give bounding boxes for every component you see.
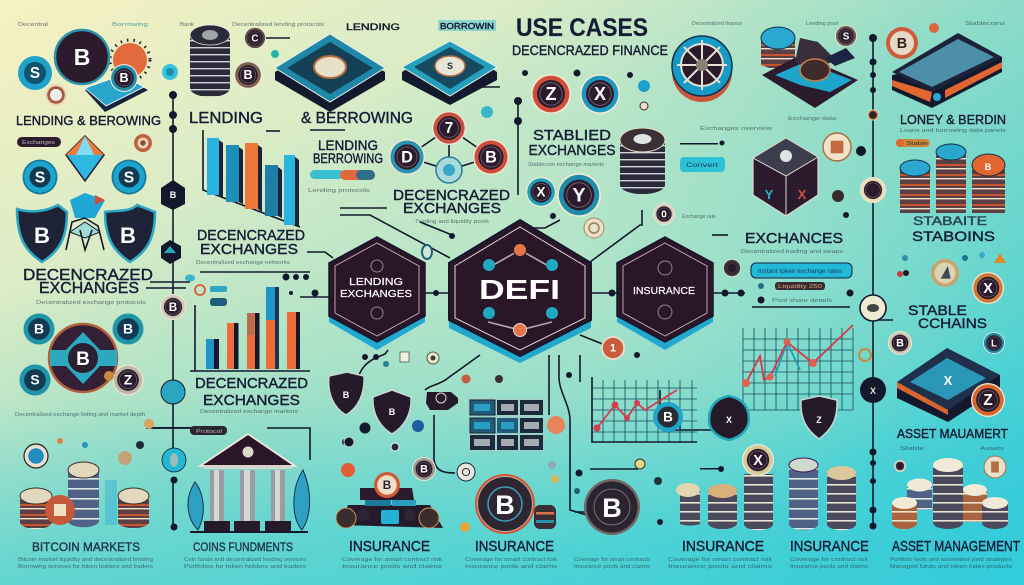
control: mid-left teal slider xyxy=(185,274,227,306)
heading: insurance two: Insurance pools and claims xyxy=(465,564,558,570)
bottom-left caption: first: Borrowing services for token holders and traders xyxy=(18,564,154,570)
heading: asset management upper: ASSET MAUAMERT xyxy=(897,426,1008,441)
pill label: Exchanges xyxy=(22,140,56,146)
icon: isometric machine xyxy=(762,38,858,108)
heading: decentralized exchanges lower xyxy=(195,375,308,415)
heading: exchances: Decentralized trading and swaps xyxy=(741,249,844,255)
icons: coins stabaite: X xyxy=(983,281,993,297)
icon: shield coin lower right xyxy=(709,396,749,440)
icons: coins top right xyxy=(835,23,939,59)
icon: small coins by stack: B xyxy=(243,68,253,82)
heading: stabaite staboins: STABAITE xyxy=(913,214,987,228)
heading: insurance four xyxy=(790,538,869,570)
icons: coins above asset card: B xyxy=(896,338,904,350)
labels: lending and borrowing teal tags: LENDING xyxy=(346,22,400,32)
control panel: exchange sliders: Pool share details xyxy=(772,298,833,304)
icon: isometric card two xyxy=(402,41,497,105)
icon: coin cluster left: S xyxy=(30,372,40,388)
icon: white node coin xyxy=(860,295,886,321)
heading: decentralized exchanges center: DECENCRAZED xyxy=(393,187,510,204)
icons: red and teal coins: X xyxy=(594,84,606,104)
icons: coins below stablied: Y xyxy=(572,185,586,207)
left hexagon: lending exchanges: LENDING xyxy=(349,277,403,288)
heading: insurance four: Insurance pools and claims xyxy=(790,564,869,570)
icons: coins beside gem xyxy=(22,134,152,194)
heading: loney berdin: Loans and borrowing data panels xyxy=(900,128,1007,134)
node: left dark hex: B xyxy=(169,301,177,314)
left hexagon: lending exchanges: EXCHANGES xyxy=(340,289,412,300)
bottom-left caption: first: BITCOIN MARKETS xyxy=(32,540,140,554)
center hexagon: defi xyxy=(449,220,591,363)
line chart: center xyxy=(592,377,697,442)
icon: big insurance coin two: B xyxy=(602,493,622,523)
icon: chain link badge xyxy=(422,245,432,259)
heading: insurance one: Insurance pools and claims xyxy=(342,564,443,570)
line chart: right xyxy=(742,325,853,410)
icon: dark badge xyxy=(426,392,458,410)
heading: stable chains xyxy=(908,302,987,331)
heading: decentralized exchanges left: DECENCRAZED xyxy=(23,267,153,284)
title: USE CASES xyxy=(516,14,648,42)
icon: coin cluster left: B xyxy=(123,321,133,337)
heading: asset management upper: Assets xyxy=(980,446,1005,452)
circuit connector lines xyxy=(146,38,893,527)
icon: orange coin near center xyxy=(601,336,625,360)
icon: shield lower right: Z xyxy=(816,415,822,425)
icon: coin cluster left: Z xyxy=(124,372,133,388)
heading: decentralized exchanges mid left: Decentralized exchange networks xyxy=(196,260,291,266)
heading: decentralized exchanges mid left xyxy=(196,227,305,266)
icons: three stablecoin stacks xyxy=(900,144,1005,213)
icon cluster: lending and borrowing: B xyxy=(74,44,90,70)
scattered badges around shield xyxy=(341,420,475,481)
icon: coin cluster left: B xyxy=(76,349,90,370)
heading: asset management upper: Stable xyxy=(900,446,924,452)
node: left dark hex: B xyxy=(170,190,177,200)
bottom-left caption: first xyxy=(18,540,154,570)
heading: decentralized exchanges mid left: DECENCRAZED xyxy=(197,227,305,244)
heading: stabaite staboins xyxy=(912,214,995,244)
icon: coin cluster left xyxy=(20,314,144,396)
heading: asset management upper xyxy=(897,426,1008,452)
right hexagon: insurance xyxy=(617,237,713,350)
icon: shield mid xyxy=(373,390,411,434)
pill label xyxy=(17,137,61,147)
small connector nodes xyxy=(169,34,877,530)
caption: third insurance body xyxy=(574,557,651,570)
heading: insurance three: Insurance pools and claims xyxy=(668,564,773,570)
icon: network of coins: 7 xyxy=(445,120,453,137)
heading: and borrowing: & BERROWING xyxy=(301,110,413,127)
labels: lending and borrowing teal tags: BORROWIN xyxy=(440,22,494,31)
control panel: exchange sliders xyxy=(723,259,852,304)
small caption text lines across the top: Exchanges overview xyxy=(700,126,773,132)
icon: shield mid: B xyxy=(389,407,396,417)
icon cluster: lending and borrowing xyxy=(18,30,150,112)
icon: large isometric book xyxy=(892,33,1002,108)
heading: insurance two xyxy=(465,538,558,570)
heading: insurance two: Coverage for smart contract risk xyxy=(465,557,558,563)
icons: coins above asset card: X xyxy=(870,386,876,396)
icon: coin stack center xyxy=(620,128,665,194)
bottom-left caption: second: COINS FUNDMENTS xyxy=(193,540,293,554)
icon: temple xyxy=(188,434,310,533)
heading: stable chains: CCHAINS xyxy=(918,315,987,331)
keypad panel xyxy=(468,398,545,452)
icon: isometric asset card xyxy=(897,348,1005,422)
icons: coins below stablied: 0 xyxy=(661,209,667,220)
heading: decentralized exchanges left: EXCHANGES xyxy=(39,280,139,297)
icon: shield coin lower right: X xyxy=(726,415,732,425)
heading: lending borrowing second: LENDING xyxy=(318,138,378,153)
bottom insurance stacks xyxy=(676,444,856,530)
heading: insurance one xyxy=(342,538,443,570)
bottom left stacks xyxy=(20,438,149,529)
icon: coin stack top xyxy=(190,25,230,97)
node: caption pill bottom left: Protocol xyxy=(196,429,222,435)
icon: coin cluster left: B xyxy=(34,321,44,337)
heading: decentralized exchanges center: EXCHANGES xyxy=(403,200,501,217)
icon: shield small left: B xyxy=(343,390,350,400)
icon: network of coins xyxy=(389,106,509,183)
bar chart: isometric xyxy=(203,130,300,227)
icon: cube: X xyxy=(798,187,807,202)
heading: stablied exchanges: EXCHANGES xyxy=(528,142,616,159)
small caption text lines across the top: Borrowing xyxy=(112,22,148,28)
icons: coins below stablied: X xyxy=(536,184,546,200)
heading: insurance two: INSURANCE xyxy=(475,538,554,555)
bottom-left caption: second: Portfolios for token holders and traders xyxy=(184,564,307,570)
icon: left shield two xyxy=(105,205,155,262)
icon: big insurance coin one xyxy=(475,474,556,534)
line chart: center: B xyxy=(663,410,673,424)
node: caption pill bottom left xyxy=(144,419,227,435)
heading: decentralized exchanges lower: EXCHANGES xyxy=(203,392,300,409)
icon: secondary gem network xyxy=(66,193,105,250)
small caption text lines across the top: Lending pool xyxy=(806,21,838,27)
small caption text lines across the top: Bank xyxy=(180,22,195,28)
icon: orange coin near center: 1 xyxy=(610,343,616,355)
heading: loney berdin: LONEY & BERDIN xyxy=(900,112,1006,127)
icon: small coins by stack xyxy=(162,27,279,89)
bottom insurance stacks: X xyxy=(753,453,763,469)
icon: teal topped stack xyxy=(761,27,795,77)
heading: insurance one: INSURANCE xyxy=(349,538,430,555)
icon: isometric card one xyxy=(275,34,385,112)
sliders: small pills xyxy=(308,170,375,194)
heading: lending: LENDING xyxy=(189,110,263,127)
icon: shield lower right xyxy=(801,396,837,439)
icon: orange coin by keypad xyxy=(547,416,565,434)
asset management stacks xyxy=(892,456,1008,529)
bar chart: flat xyxy=(190,287,310,371)
icon: isometric asset card: X xyxy=(944,373,953,388)
heading: insurance three: INSURANCE xyxy=(682,538,764,555)
labels: lending and borrowing teal tags xyxy=(346,20,496,32)
icon: cube xyxy=(753,138,818,216)
heading: lending borrowing second: BERROWING xyxy=(313,151,383,166)
lower left stacks: small badges xyxy=(383,352,503,384)
title xyxy=(512,14,668,58)
icon: teal coin bottom-left line xyxy=(162,448,186,472)
icons: coins near cube xyxy=(823,110,886,203)
heading: loney berdin xyxy=(900,112,1007,134)
small pill tag xyxy=(896,139,930,147)
icon: cube: Y xyxy=(765,187,774,202)
icons: coins top right: B xyxy=(897,36,907,52)
label tag mid right: Exchange rate xyxy=(682,214,716,220)
node: left dark hex xyxy=(160,180,186,404)
icon: ship wheel xyxy=(672,36,732,102)
small caption text lines across the top xyxy=(18,21,1006,132)
icons: red and teal coins: Z xyxy=(546,84,556,104)
pill: teal button upper: Convert xyxy=(686,163,718,169)
pill: teal button upper xyxy=(680,140,725,172)
icon: network of coins: B xyxy=(485,148,497,166)
icons: coins above asset card xyxy=(859,331,1005,403)
icons: coins above asset card: L xyxy=(991,338,997,349)
icon: left shield two: B xyxy=(120,223,136,248)
icons: coins beside gem: S xyxy=(124,169,134,186)
bottom-left caption: second xyxy=(184,540,307,570)
small caption text lines across the top: Decentral xyxy=(18,22,48,28)
center hexagon: defi: DEFI xyxy=(479,274,560,305)
icon cluster: lending and borrowing: S xyxy=(30,65,40,82)
icons: coins beside gem: S xyxy=(35,169,45,186)
heading: insurance three xyxy=(668,538,773,570)
heading: asset management: Managed funds and token index products xyxy=(890,564,1013,570)
heading: insurance three: Coverage for smart contract risk xyxy=(668,557,773,563)
right hexagon: insurance: INSURANCE xyxy=(633,286,695,297)
icon: left shield one xyxy=(17,205,67,262)
heading: decentralized exchanges mid left: EXCHANGES xyxy=(200,241,298,258)
heading: decentralized exchanges center xyxy=(393,187,510,225)
heading: exchances: EXCHANCES xyxy=(745,230,843,247)
caption: third insurance body: Insurance pools and claims xyxy=(574,564,651,570)
icon: big insurance coin one: B xyxy=(495,490,515,520)
sliders: small pills: Lending protocols xyxy=(308,188,371,194)
icons: coins top right: S xyxy=(843,31,850,42)
small caption text lines across the top: Decentralized finance xyxy=(692,21,742,27)
small caption text lines across the top: Decentralized lending protocols xyxy=(232,22,325,28)
scattered badges around shield: B xyxy=(420,464,428,476)
heading: stablied exchanges: Stablecoin exchange markets xyxy=(528,162,605,168)
icons: three stablecoin stacks: B xyxy=(985,162,992,172)
icon: small coins by stack: C xyxy=(251,33,259,44)
icon: isometric asset card: Z xyxy=(983,392,993,409)
heading: asset management: Portfolio tools and automated yield strategies xyxy=(890,557,1013,563)
heading: stablied exchanges xyxy=(528,127,616,168)
heading: insurance one: Coverage for smart contract risk xyxy=(342,557,443,563)
icon: gem xyxy=(66,136,104,181)
icon: left shield one: B xyxy=(34,223,50,248)
heading: decentralized exchanges center: Trading and liquidity pools xyxy=(415,219,490,225)
icon: shield small left xyxy=(329,372,364,415)
small caption text lines across the top: Stablecoins xyxy=(965,21,1006,27)
heading: stablied exchanges: STABLIED xyxy=(533,127,611,144)
heading: decentralized exchanges left: Decentralized exchange protocols xyxy=(36,300,147,306)
heading: stabaite staboins: STABOINS xyxy=(912,228,995,244)
icon cluster: lending and borrowing: B xyxy=(119,71,129,85)
icon: isometric card two: S xyxy=(447,61,453,71)
heading: lending borrowing second xyxy=(313,138,383,166)
small caption text lines across the top: Exchange data xyxy=(788,116,836,122)
control panel: exchange sliders: Instant token exchange rates xyxy=(758,269,842,275)
bottom-left caption: second: Coin funds and decentralized lending services xyxy=(184,557,307,563)
heading: insurance four: Coverage for contract risk xyxy=(790,557,869,563)
icons: coins below stablied xyxy=(526,173,675,238)
icon: big insurance coin two xyxy=(460,459,662,535)
icon: car machine: B xyxy=(383,479,391,492)
caption: third insurance body: Coverage for smart contracts xyxy=(574,557,651,563)
heading: decentralized exchanges lower: Decentralized exchange markets xyxy=(200,409,299,415)
heading: decentralized exchanges left xyxy=(23,267,153,306)
control panel: exchange sliders: Liquidity 250 xyxy=(778,284,822,290)
caption: asset line left: Decentralized exchange listing and market depth xyxy=(15,412,145,418)
icon: network of coins: D xyxy=(401,148,413,166)
heading: asset management xyxy=(890,538,1020,570)
heading: insurance four: INSURANCE xyxy=(790,538,869,555)
heading: decentralized exchanges lower: DECENCRAZED xyxy=(195,375,308,392)
heading: stable chains: STABLE xyxy=(908,302,967,318)
heading: lending and borrowing: LENDING & BEROWING xyxy=(16,114,161,128)
small pill tag: Stable xyxy=(906,141,928,147)
icons: coins stabaite xyxy=(897,252,1006,304)
title: DECENCRAZED FINANCE xyxy=(512,43,668,58)
icon: car machine xyxy=(336,472,443,528)
left hexagon: lending exchanges xyxy=(329,237,425,350)
heading: exchances xyxy=(741,230,844,255)
icons: red and teal coins xyxy=(531,74,650,114)
bottom-left caption: first: Bitcoin market liquidity and decentralized lending xyxy=(18,557,153,563)
